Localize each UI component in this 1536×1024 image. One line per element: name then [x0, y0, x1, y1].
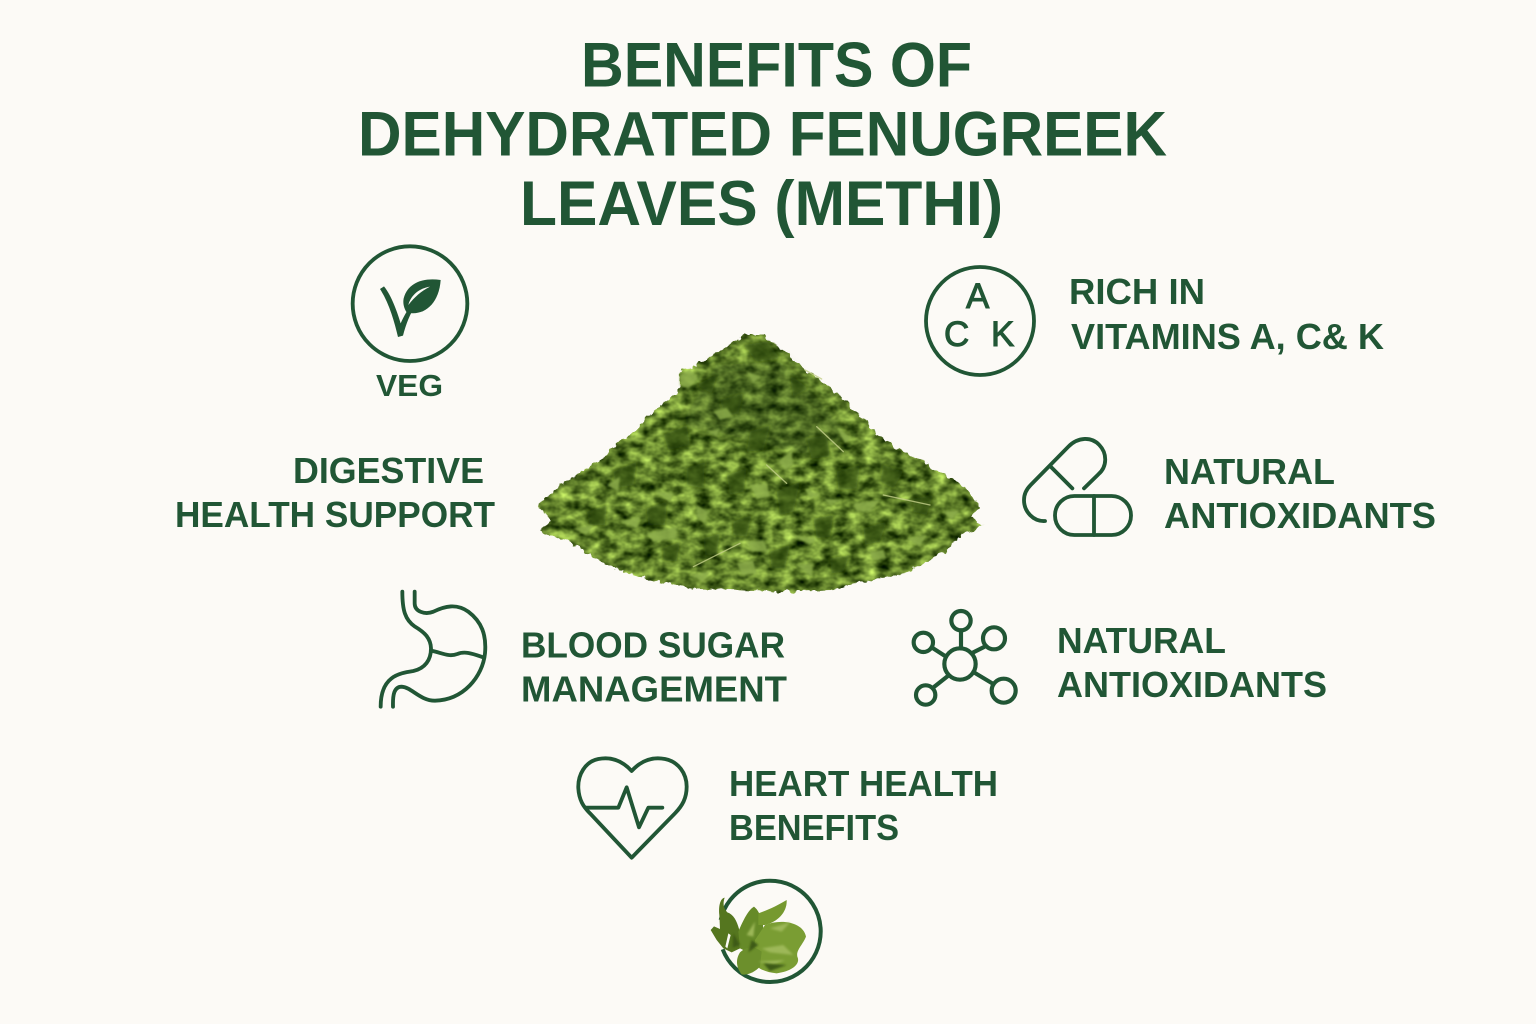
icon: vitamins A C K circle: K: [991, 315, 1014, 354]
benefit: natural antioxidants with molecule: [914, 611, 1327, 705]
benefit: heart health benefits: [578, 758, 998, 858]
benefit: digestive health support: HEALTH SUPPORT: [175, 494, 495, 535]
benefit: vegetarian badge: [353, 246, 467, 403]
label: heart health benefits: HEART HEALTH: [729, 763, 998, 804]
label: heart health benefits: BENEFITS: [729, 807, 899, 848]
central pile of dried fenugreek leaves: [538, 335, 983, 592]
icon: capsule and pill: [1024, 439, 1131, 535]
icon: heart with pulse: [578, 758, 687, 858]
icon: vitamins A C K circle: [926, 267, 1034, 375]
label: natural antioxidants: ANTIOXIDANTS: [1164, 495, 1436, 536]
label: rich in vitamins: VITAMINS A, C& K: [1071, 316, 1384, 357]
title: [358, 30, 1167, 239]
label: natural antioxidants: NATURAL: [1164, 451, 1335, 492]
benefit: blood sugar management: [381, 592, 787, 710]
benefit: natural antioxidants with capsule: [1024, 439, 1436, 536]
label: heart health benefits: [729, 763, 998, 848]
label: rich in vitamins: RICH IN: [1069, 271, 1205, 312]
label: natural antioxidants: [1164, 451, 1436, 536]
label: VEG: VEG: [376, 368, 443, 403]
icon: vitamins A C K circle: A: [966, 277, 990, 316]
icon: molecule: [914, 611, 1016, 705]
title: BENEFITS OF: [581, 30, 972, 100]
label: blood sugar management: [521, 624, 787, 710]
label: natural antioxidants: NATURAL: [1057, 620, 1226, 661]
icon: circle with fenugreek leaves: [711, 881, 821, 982]
icon: stomach: [381, 592, 485, 707]
icon: vegetarian leaf badge: [353, 246, 467, 361]
icon: vitamins A C K circle: C: [944, 315, 969, 354]
benefit: rich in vitamins: [926, 267, 1384, 375]
benefit: digestive health support: [175, 450, 495, 535]
label: natural antioxidants: [1057, 620, 1327, 705]
label: blood sugar management: BLOOD SUGAR: [521, 624, 785, 666]
label: natural antioxidants: ANTIOXIDANTS: [1057, 664, 1327, 705]
benefit: digestive health support: DIGESTIVE: [293, 450, 484, 491]
label: rich in vitamins: [1069, 271, 1384, 357]
title: DEHYDRATED FENUGREEK: [358, 100, 1167, 170]
title: LEAVES (METHI): [520, 169, 1003, 239]
label: blood sugar management: MANAGEMENT: [521, 668, 787, 710]
